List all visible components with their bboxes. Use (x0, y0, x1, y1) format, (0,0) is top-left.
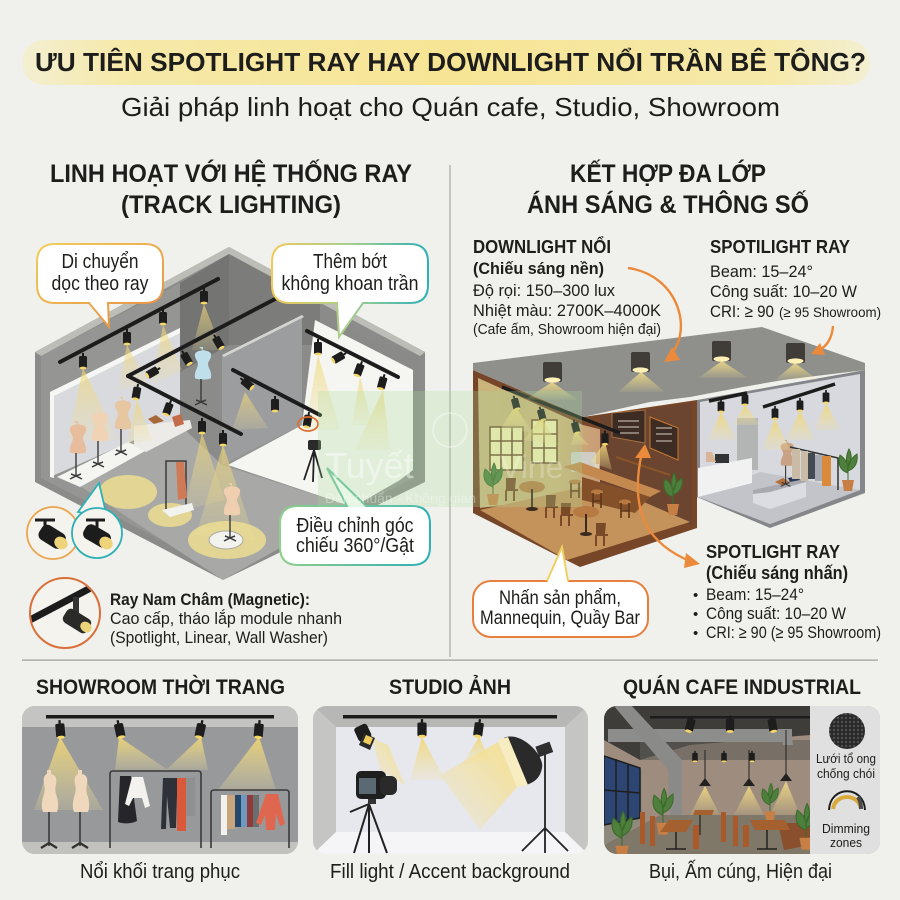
bar counter (563, 462, 661, 513)
text: spotlight accent specs: (Chiếu sáng nhấn) (706, 563, 848, 583)
tripod camera (304, 440, 322, 482)
text: track spotlight specs: (≥ 95 Showroom) (779, 304, 881, 320)
coffee machine (571, 452, 599, 478)
watermark (318, 391, 582, 507)
sidebar (810, 706, 880, 854)
icon: zoom spotlight (72, 483, 122, 558)
text: downlight specs (473, 236, 662, 338)
shop window display (50, 328, 192, 487)
label: anti-glare honeycomb: chống chói (817, 767, 875, 781)
text: track spotlight specs: Beam: 15–24° (710, 262, 813, 281)
text: spotlight accent specs: • (693, 587, 698, 604)
heading: track lighting: (TRACK LIGHTING) (121, 191, 341, 219)
softbox on stand (498, 736, 568, 853)
plants and furniture (612, 783, 816, 858)
callout: add or remove: không khoan trần (282, 273, 418, 295)
text: magnetic rail note: Cao cấp, tháo lắp module nhanh (110, 609, 342, 628)
heading: layered lighting and specs: KẾT HỢP ĐA LỚP (570, 158, 766, 188)
caption: industrial cafe: Bụi, Ấm cúng, Hiện đại (649, 860, 832, 883)
text: downlight specs: Độ rọi: 150–300 lux (473, 281, 615, 300)
icon: magnetic rail (28, 578, 100, 648)
callout: accent products: Mannequin, Quầy Bar (480, 608, 641, 629)
floor (77, 425, 353, 580)
concrete ceiling slab (473, 327, 865, 417)
illustration: track lighting room (35, 247, 425, 580)
title (22, 40, 870, 85)
text: spotlight accent specs (693, 542, 881, 642)
mannequins (41, 770, 89, 848)
window (604, 756, 640, 825)
label: anti-glare honeycomb: Lưới tổ ong (816, 752, 876, 766)
white studio floor and backdrop (222, 315, 413, 507)
panel: photo studio (313, 706, 588, 854)
text: track spotlight specs: CRI: ≥ 90 (710, 302, 774, 321)
label: dimming zones: zones (830, 836, 862, 850)
callout: accent products (473, 547, 648, 637)
caption: fashion showroom: Nổi khối trang phục (80, 861, 240, 883)
heading: layered lighting and specs: ÁNH SÁNG & THÔNG SỐ (527, 189, 809, 219)
clothing rack two (211, 790, 289, 848)
light pools on floor (99, 475, 266, 559)
watermark: Vine (500, 449, 563, 485)
text: track spotlight specs: Công suất: 10–20 W (710, 282, 857, 301)
callout: adjust angle: chiếu 360°/Gật (296, 535, 414, 557)
panel: industrial cafe (604, 706, 880, 858)
floor (604, 815, 810, 854)
arrow: to track spotlight ceiling (811, 326, 833, 355)
arrow: to downlight (628, 268, 681, 362)
subtitle: Giải pháp linh hoạt cho Quán cafe, Studio, Showroom (121, 92, 780, 122)
caption: photo studio: Fill light / Accent background (330, 861, 570, 883)
studio track heads (353, 719, 485, 750)
watermark: Đèn chuẩn - Không gian (325, 490, 476, 506)
text: spotlight accent specs: SPOTLIGHT RAY (706, 542, 840, 562)
light beams (68, 304, 390, 540)
label: dimming zones: Dimming (822, 822, 870, 836)
track rails (60, 279, 398, 434)
text: magnetic rail note (110, 591, 342, 647)
callout: accent products: Nhấn sản phẩm, (499, 588, 621, 609)
callout: adjust angle (280, 468, 430, 565)
light beams (372, 737, 517, 830)
text: downlight specs: (Cafe ấm, Showroom hiện đại) (473, 321, 661, 338)
showroom room (697, 370, 865, 528)
clothing rack one (110, 771, 201, 848)
cafe room (473, 370, 697, 567)
heading: fashion showroom: SHOWROOM THỜI TRANG (36, 675, 285, 699)
ductwork (608, 706, 792, 820)
illustration: cutaway cafe and showroom (473, 327, 865, 567)
pendant lamps (690, 730, 800, 815)
title: ƯU TIÊN SPOTLIGHT RAY HAY DOWNLIGHT NỔI TRẦN BÊ TÔNG? (35, 47, 866, 77)
icon: honeycomb grid (829, 713, 865, 749)
text: spotlight accent specs: Beam: 15–24° (706, 585, 804, 604)
callout: move along rail: dọc theo ray (52, 273, 148, 295)
heading: track lighting: LINH HOẠT VỚI HỆ THỐNG RAY (50, 158, 412, 188)
mannequins and clothing rack (70, 347, 243, 549)
menu boards (612, 410, 678, 475)
light beams (34, 737, 276, 810)
icon: round spotlight (27, 507, 79, 559)
text: track spotlight specs (710, 237, 881, 321)
heading: industrial cafe: QUÁN CAFE INDUSTRIAL (623, 676, 861, 699)
callout: move along rail (37, 244, 163, 327)
arrow: double-headed accent (635, 444, 700, 568)
text: spotlight accent specs: • (693, 606, 698, 623)
windows (490, 420, 557, 470)
text: spotlight accent specs: • (693, 625, 698, 642)
text: downlight specs: DOWNLIGHT NỔI (473, 236, 611, 257)
heading: track lighting (50, 158, 412, 219)
callout: add or remove: Thêm bớt (313, 251, 387, 273)
heading: photo studio: STUDIO ẢNH (389, 676, 511, 699)
text: downlight specs: Nhiệt màu: 2700K–4000K (473, 301, 662, 320)
camera on tripod (350, 771, 397, 853)
label: dimming zones (823, 824, 870, 847)
callout: move along rail: Di chuyển (62, 251, 138, 273)
callout: add or remove (272, 244, 428, 337)
text: magnetic rail note: (Spotlight, Linear, Wall Washer) (110, 629, 328, 647)
watermark: Tuyết (325, 445, 414, 486)
text: spotlight accent specs: Công suất: 10–20 W (706, 604, 846, 623)
surface downlights (525, 341, 818, 400)
track spotlights (79, 288, 388, 446)
panel: fashion showroom (22, 706, 298, 854)
text: downlight specs: (Chiếu sáng nền) (473, 259, 604, 278)
heading: layered lighting and specs (527, 158, 809, 219)
track heads (650, 715, 810, 762)
label: anti-glare honeycomb (816, 752, 876, 781)
callout: adjust angle: Điều chỉnh góc (296, 515, 414, 537)
track heads (55, 719, 264, 740)
text: track spotlight specs: SPOTILIGHT RAY (710, 237, 850, 257)
rotation arrow (298, 417, 318, 431)
text: magnetic rail note: Ray Nam Châm (Magnetic): (110, 591, 310, 609)
icon: dimming arc (829, 791, 865, 810)
